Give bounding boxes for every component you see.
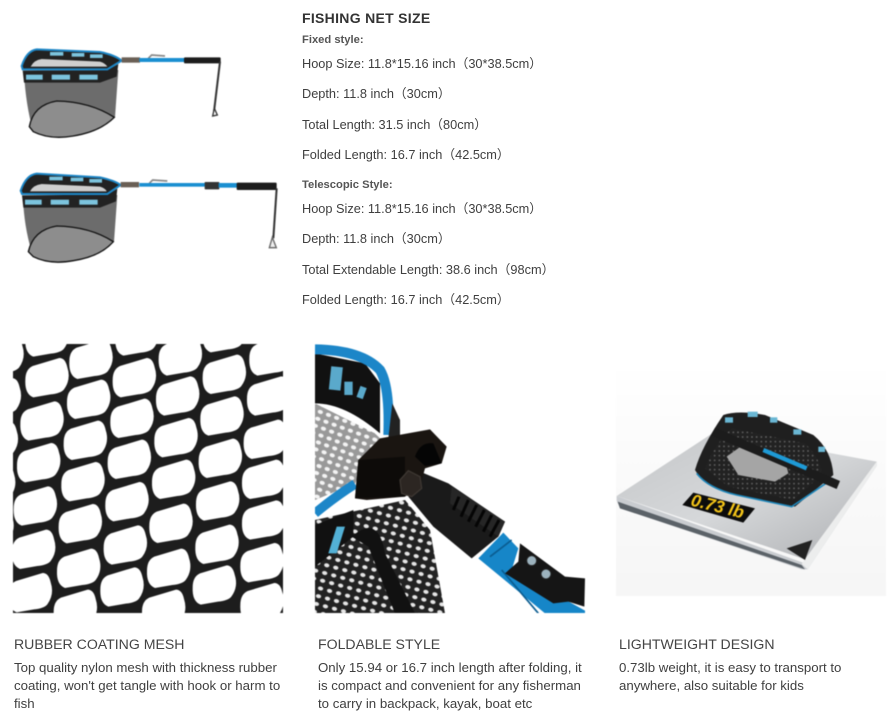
feature: rubber coating mesh: coating, won't get tangle with hook or harm to [14,678,280,693]
feature: rubber coating mesh [14,636,280,711]
feature: foldable style: to carry in backpack, kayak, boat etc [318,696,532,711]
spec block: fixed style: Folded Length: 16.7 inch（42.5cm） [302,147,510,162]
spec block: telescopic style: Folded Length: 16.7 inch（42.5cm） [302,292,510,307]
spec block: fixed style: Depth: 11.8 inch（30cm） [302,86,451,101]
feature: rubber coating mesh: fish [14,696,35,711]
spec block: fixed style: Total Length: 31.5 inch（80cm） [302,117,487,132]
feature: foldable style [318,636,582,711]
spec block: telescopic style: Depth: 11.8 inch（30cm） [302,231,451,246]
spec block: telescopic style [302,179,554,307]
product image: telescopic style net [18,172,278,264]
spec block: telescopic style: Hoop Size: 11.8*15.16 inch（30*38.5cm） [302,201,542,216]
product image: fixed style net [20,48,222,139]
feature: lightweight design: anywhere, also suitable for kids [619,678,804,693]
photo: rubber coated mesh close-up [12,343,284,614]
feature: lightweight design: LIGHTWEIGHT DESIGN [619,636,775,652]
feature: rubber coating mesh: RUBBER COATING MESH [14,636,184,652]
heading: fishing net size: FISHING NET SIZE [302,10,430,26]
scale readout: 0.73 lb [689,490,747,522]
feature: foldable style: FOLDABLE STYLE [318,636,440,652]
spec block: telescopic style: Telescopic Style: [302,179,393,191]
photo: folding joint close-up [314,344,586,614]
feature: rubber coating mesh: Top quality nylon mesh with thickness rubber [14,660,277,675]
feature: foldable style: is compact and convenient for any fisherman [318,678,581,693]
spec block: fixed style: Hoop Size: 11.8*15.16 inch（30*38.5cm） [302,56,542,71]
photo: net on digital scale [616,410,886,596]
spec block: fixed style: Fixed style: [302,34,364,46]
spec block: fixed style [302,34,542,162]
feature: lightweight design [619,636,841,693]
spec block: telescopic style: Total Extendable Length: 38.6 inch（98cm） [302,262,554,277]
feature: lightweight design: 0.73lb weight, it is easy to transport to [619,660,841,675]
feature: foldable style: Only 15.94 or 16.7 inch length after folding, it [318,660,582,675]
